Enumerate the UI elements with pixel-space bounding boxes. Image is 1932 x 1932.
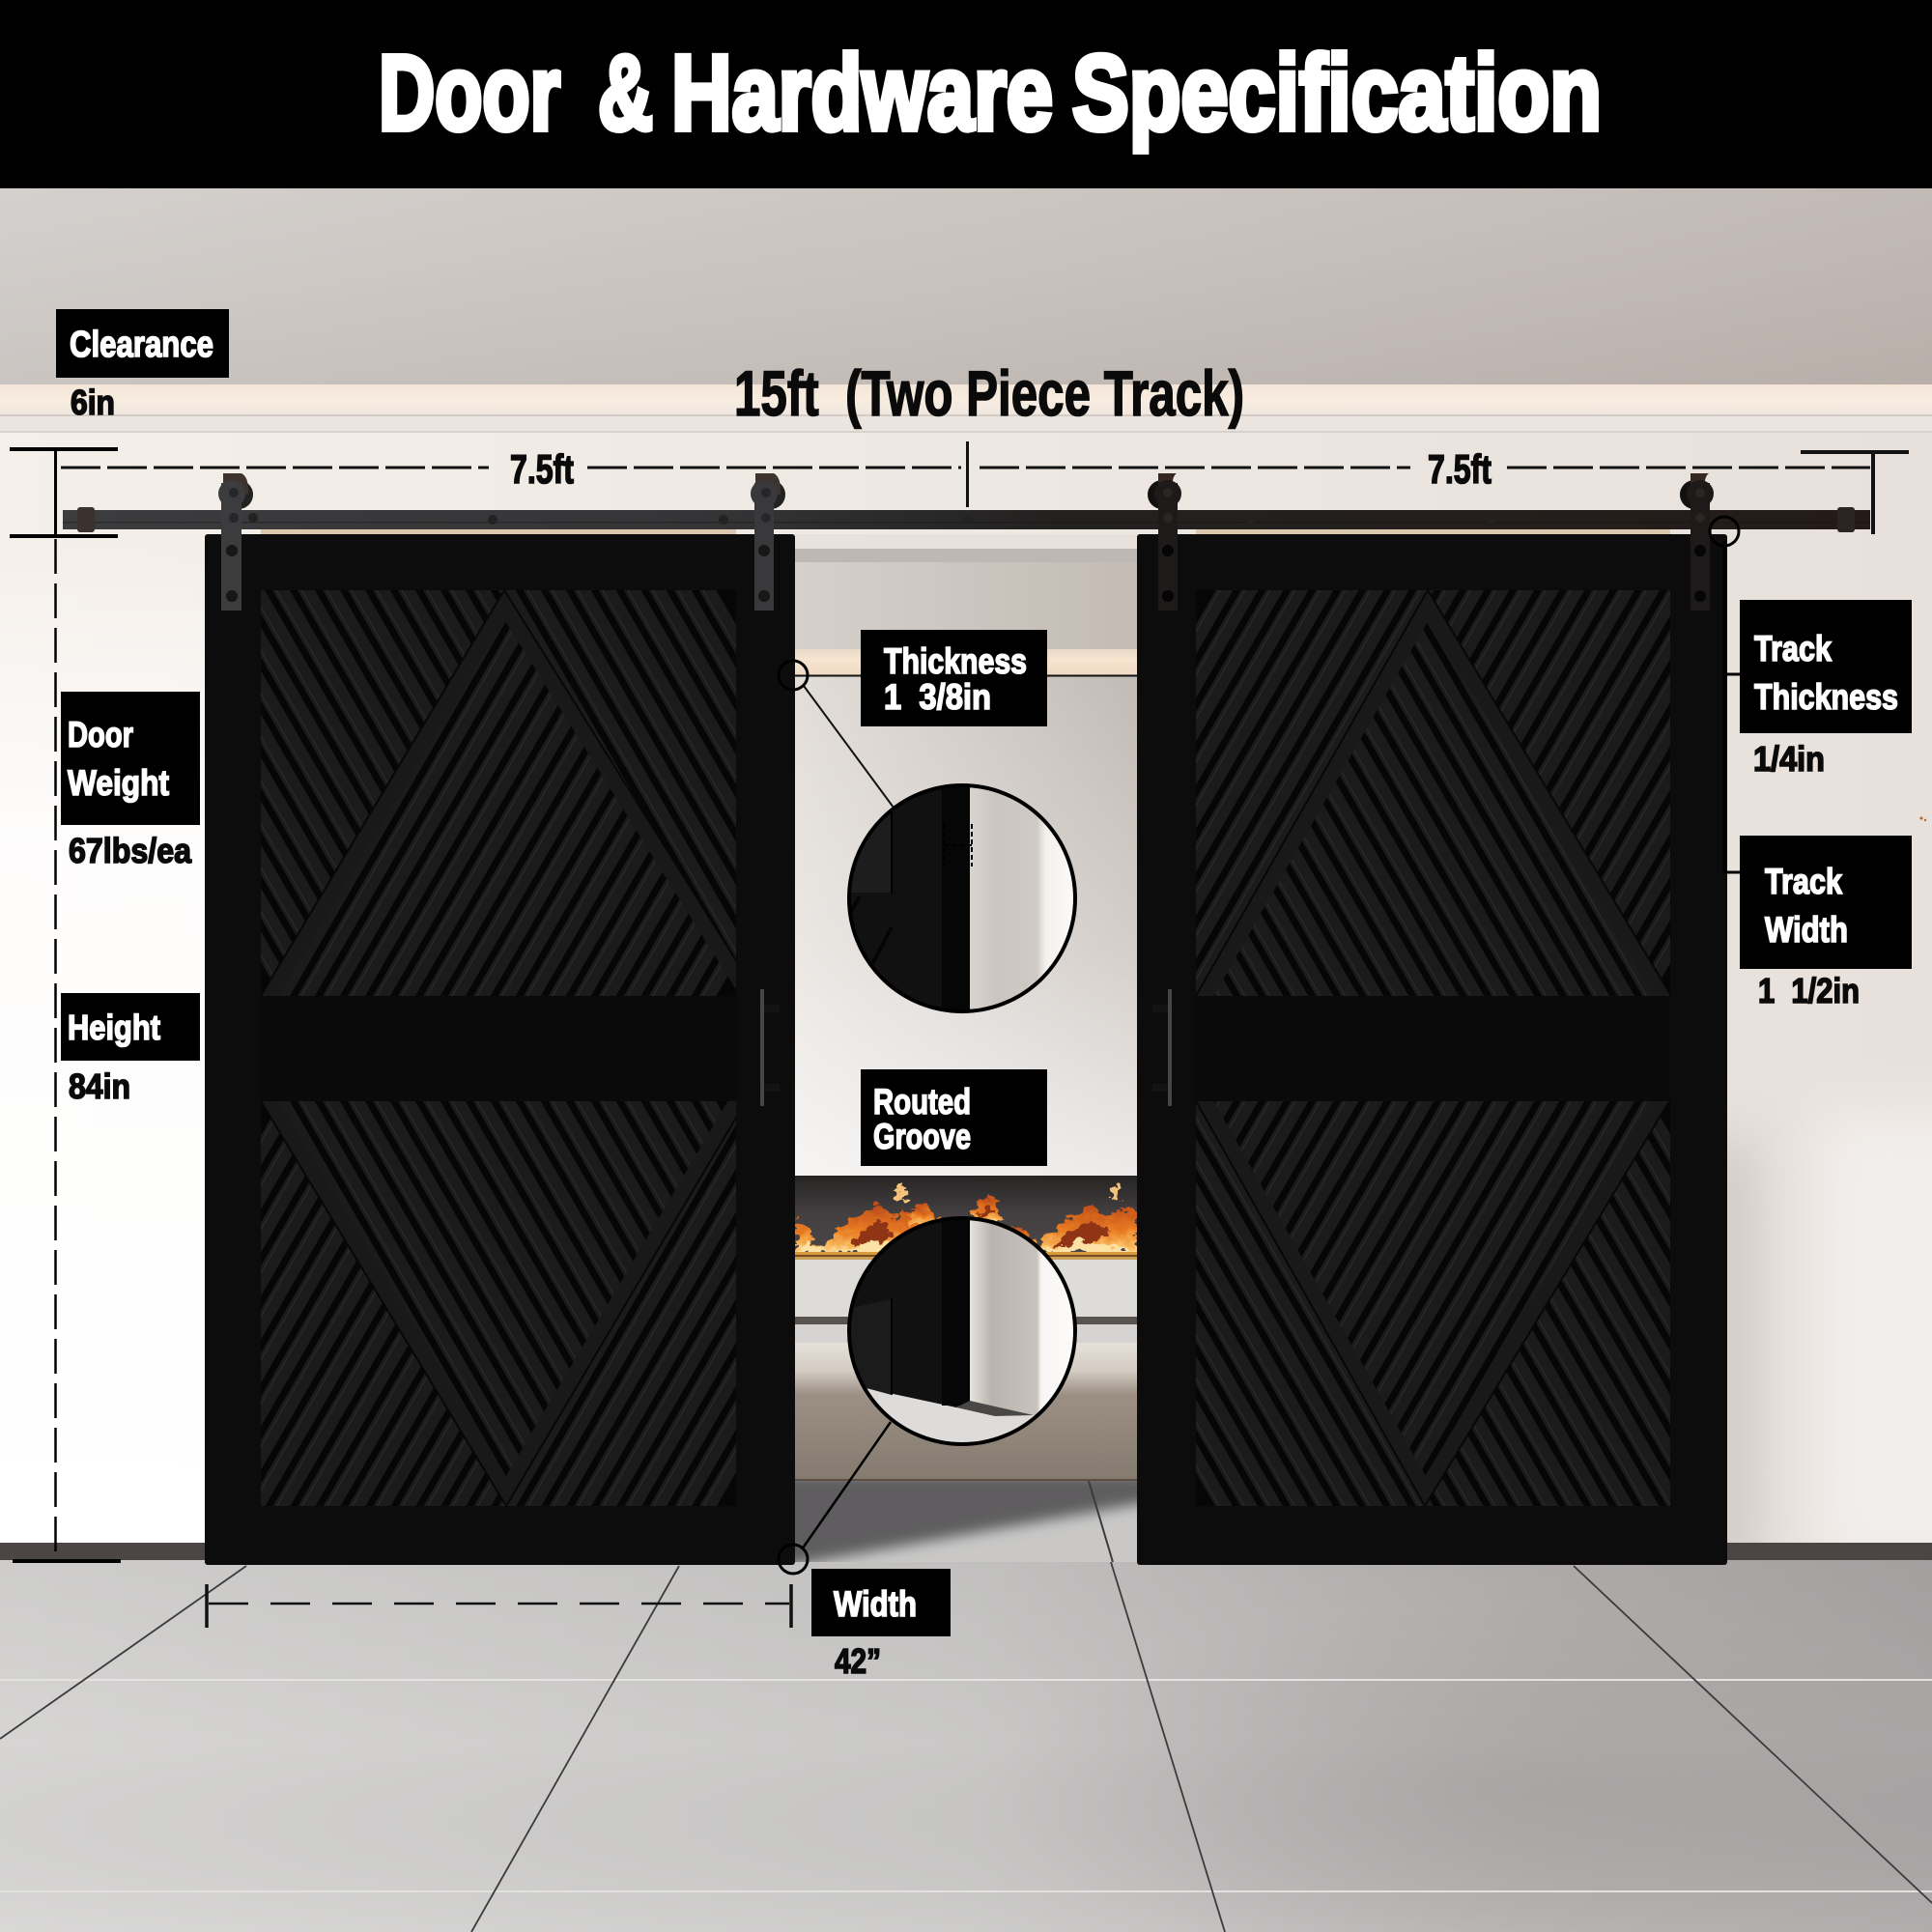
height label: Height (68, 1008, 160, 1047)
track thickness label: 1/4in (1753, 739, 1825, 779)
magnified inset: top of door edge (846, 784, 1078, 1012)
track width label: Width (1765, 910, 1848, 950)
wall (0, 433, 1932, 1584)
upper slat panel (1182, 590, 1685, 996)
lower slat panel (1182, 1101, 1685, 1506)
width label (811, 1569, 951, 1681)
track thickness label: Thickness (1754, 677, 1898, 717)
hanger left door left (218, 473, 253, 611)
track length heading: 15ft (Two Piece Track) (734, 357, 1244, 429)
clearance label (56, 309, 229, 422)
middle rail (261, 996, 736, 1101)
routed groove label (861, 1069, 1047, 1166)
width callout line (802, 1422, 891, 1549)
track thickness connector (1724, 541, 1740, 872)
door handle (760, 989, 780, 1106)
title: Door (379, 34, 560, 153)
door weight label: 67lbs/ea (69, 831, 192, 870)
track width label (1740, 836, 1912, 1010)
routed groove label: Groove (873, 1117, 971, 1156)
right door (1137, 534, 1727, 1565)
door handle (1152, 989, 1172, 1106)
title bar (0, 0, 1932, 188)
hanger left door right (751, 473, 785, 611)
hanger right door left (1148, 473, 1181, 611)
hanger right door right (1680, 473, 1714, 611)
magnified inset: bottom of door edge (846, 1212, 1078, 1449)
door weight label: Door (68, 715, 133, 754)
height dimension line (10, 449, 121, 1561)
track dimension left half: 7.5ft (510, 446, 574, 492)
title: & (598, 34, 653, 153)
upper slat panel (247, 590, 758, 996)
fireplace (795, 1176, 1137, 1260)
track thickness label: Track (1754, 629, 1832, 668)
clearance label: Clearance (70, 325, 213, 365)
center tick (966, 441, 969, 507)
right end bracket (1801, 452, 1909, 534)
thickness callout line (795, 676, 1137, 808)
track callout circle (1710, 517, 1739, 546)
height label: 84in (69, 1066, 130, 1106)
middle rail (1196, 996, 1670, 1101)
clearance label: 6in (71, 383, 115, 422)
cove light and crown moulding (0, 384, 1932, 433)
door frame (205, 534, 795, 1565)
width marker circle (779, 1545, 808, 1574)
title: Hardware (671, 34, 1053, 153)
track width label: Track (1765, 862, 1842, 901)
thickness marker circle (779, 661, 808, 690)
routed groove label: Routed (873, 1082, 971, 1122)
thickness label (861, 630, 1047, 726)
floor (0, 1560, 1932, 1932)
wall fleck (1920, 817, 1926, 821)
title: Specification (1072, 34, 1602, 153)
baseboard (0, 1543, 1932, 1561)
width label: Width (834, 1584, 917, 1624)
door weight label (61, 692, 200, 870)
thickness label: Thickness (884, 641, 1027, 681)
title (379, 34, 1602, 153)
ceiling (0, 188, 1932, 384)
room scene seen through the opening (795, 534, 1137, 1563)
door frame (1137, 534, 1727, 1565)
height label (61, 993, 200, 1106)
barn door track (63, 507, 1870, 534)
track dimension right half: 7.5ft (1428, 446, 1492, 492)
width label: 42” (835, 1641, 881, 1681)
track width label: 1 1/2in (1758, 971, 1860, 1010)
lower slat panel (247, 1101, 750, 1506)
track thickness label (1740, 600, 1912, 779)
thickness label: 1 3/8in (884, 677, 991, 717)
door weight label: Weight (68, 763, 169, 803)
left door (205, 534, 795, 1565)
width dimension line (207, 1584, 791, 1628)
